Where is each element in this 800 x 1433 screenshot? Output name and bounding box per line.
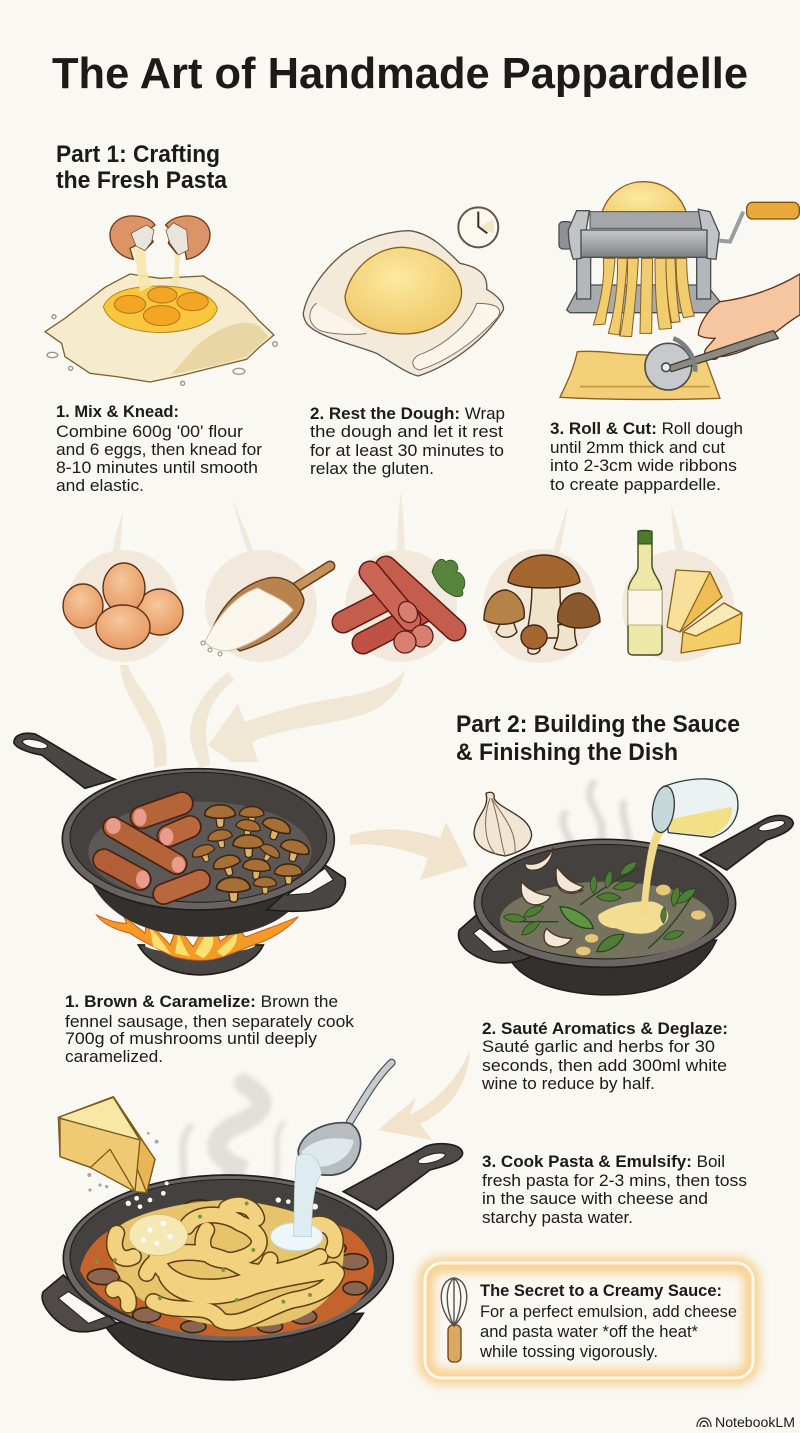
step 1.1 text: and elastic. <box>56 476 144 495</box>
step 1.1 text <box>56 402 262 495</box>
illustration: burner flame <box>97 915 298 975</box>
pasta ribbons <box>113 1205 337 1322</box>
illustration: pasta machine and cutter <box>559 182 800 399</box>
title: The Art of Handmade Pappardelle <box>52 49 748 98</box>
step 2.2 text: Sauté garlic and herbs for 30 <box>482 1037 715 1056</box>
callout text: and pasta water *off the heat* <box>480 1322 698 1341</box>
step 2.3 text: fresh pasta for 2-3 mins, then toss <box>482 1171 747 1190</box>
step 2.3 text: 3. Cook Pasta & Emulsify: Boil <box>482 1152 725 1171</box>
heading: part 2: Part 2: Building the Sauce <box>456 711 740 738</box>
egg shells <box>110 216 155 259</box>
step 1.3 text: until 2mm thick and cut <box>550 438 725 457</box>
pizza cutter <box>645 343 692 390</box>
illustration: final pan with pappardelle <box>42 1083 463 1380</box>
arrow: sauce to final pan <box>378 1050 470 1140</box>
pasta base <box>110 1200 344 1327</box>
steam <box>563 783 628 865</box>
heading: part 1 <box>56 141 227 194</box>
logo: NotebookLM: NotebookLM <box>715 1414 795 1430</box>
hand <box>698 274 800 359</box>
pasta sheet <box>560 351 720 399</box>
step 1.2 text: relax the gluten. <box>310 459 434 478</box>
step 2.1 text: 700g of mushrooms until deeply <box>65 1029 318 1048</box>
step 2.1 text: caramelized. <box>65 1047 163 1066</box>
step 1.2 text: for at least 30 minutes to <box>310 441 504 460</box>
icon: clock <box>458 207 498 247</box>
heading: part 2: & Finishing the Dish <box>456 739 678 766</box>
step 1.3 text: 3. Roll & Cut: Roll dough <box>550 419 743 438</box>
step 2.1 text: fennel sausage, then separately cook <box>65 1012 355 1031</box>
ingredient backdrop circles and wisps <box>67 490 734 663</box>
garlic cloves <box>521 847 583 947</box>
arrow: pan to sauce <box>350 822 468 880</box>
icon: parsley <box>432 559 465 597</box>
heading: part 1: the Fresh Pasta <box>56 167 227 194</box>
water splash <box>271 1223 323 1251</box>
pasta ribbons <box>593 258 694 337</box>
step 2.3 text: in the sauce with cheese and <box>482 1189 708 1208</box>
illustration: flour well with eggs <box>45 216 277 385</box>
step 1.1 text: Combine 600g '00' flour <box>56 422 243 441</box>
illustration: saute pan with garlic and herbs <box>459 779 793 995</box>
sausages in pan <box>104 803 200 894</box>
flour specks <box>47 315 277 385</box>
step 2.2 text: wine to reduce by half. <box>481 1074 655 1093</box>
step 1.2 text: 2. Rest the Dough: Wrap <box>310 404 505 423</box>
step 1.3 text <box>550 419 743 494</box>
step 1.2 text: the dough and let it rest <box>310 422 503 441</box>
illustration: pan with sausage and mushrooms <box>14 733 345 937</box>
step 1.2 text <box>310 404 505 478</box>
grated cheese pile <box>129 1214 188 1256</box>
mushrooms in sauce <box>87 1200 368 1333</box>
egg white strands <box>132 247 182 292</box>
glass with wine <box>650 779 738 837</box>
icon: garlic bulb <box>474 792 532 856</box>
callout text: For a perfect emulsion, add cheese <box>480 1302 737 1321</box>
illustration: parmesan wedge <box>58 1097 159 1193</box>
step 1.1 text: and 6 eggs, then knead for <box>56 440 262 459</box>
arrows: ingredients into pan <box>120 665 405 768</box>
heading: part 1: Part 1: Crafting <box>56 141 220 168</box>
step 1.1 text: 1. Mix & Knead: <box>56 402 179 421</box>
illustration: ladle pouring water <box>293 1063 392 1237</box>
step 2.1 text <box>65 992 355 1066</box>
callout text: The Secret to a Creamy Sauce: <box>480 1281 722 1300</box>
step 2.3 text: starchy pasta water. <box>482 1208 633 1227</box>
illustration: resting dough in cloth <box>303 231 503 376</box>
step 1.3 text: to create pappardelle. <box>550 475 721 494</box>
icon: mushrooms <box>484 555 600 654</box>
yolks <box>114 287 208 326</box>
step 2.2 text <box>481 1019 728 1093</box>
wine puddle <box>598 901 668 934</box>
icon: whisk <box>441 1278 467 1362</box>
step 2.1 text: 1. Brown & Caramelize: Brown the <box>65 992 338 1011</box>
icon: flour scoop <box>201 566 330 656</box>
step 2.3 text <box>482 1152 747 1227</box>
heading: part 2 <box>456 711 740 766</box>
sauce <box>80 1210 374 1337</box>
callout text <box>479 1281 737 1361</box>
herb flecks <box>95 1201 312 1304</box>
mushrooms in pan <box>190 805 311 902</box>
wine pour stream <box>640 816 673 915</box>
callout: secret to a creamy sauce <box>425 1263 753 1378</box>
step 2.2 text: 2. Sauté Aromatics & Deglaze: <box>482 1019 728 1038</box>
icon: eggs <box>63 563 183 649</box>
icon: sausages <box>343 567 455 643</box>
step 1.3 text: into 2-3cm wide ribbons <box>550 456 737 475</box>
icon: wine bottle <box>628 530 662 655</box>
icon: sausage slices <box>394 598 433 653</box>
step 2.2 text: seconds, then add 300ml white <box>482 1056 727 1075</box>
steam <box>183 1083 283 1193</box>
callout text: while tossing vigorously. <box>479 1342 658 1361</box>
herbs <box>503 860 699 955</box>
icon: parmesan wedges <box>667 570 742 653</box>
step 1.1 text: 8-10 minutes until smooth <box>56 458 258 477</box>
